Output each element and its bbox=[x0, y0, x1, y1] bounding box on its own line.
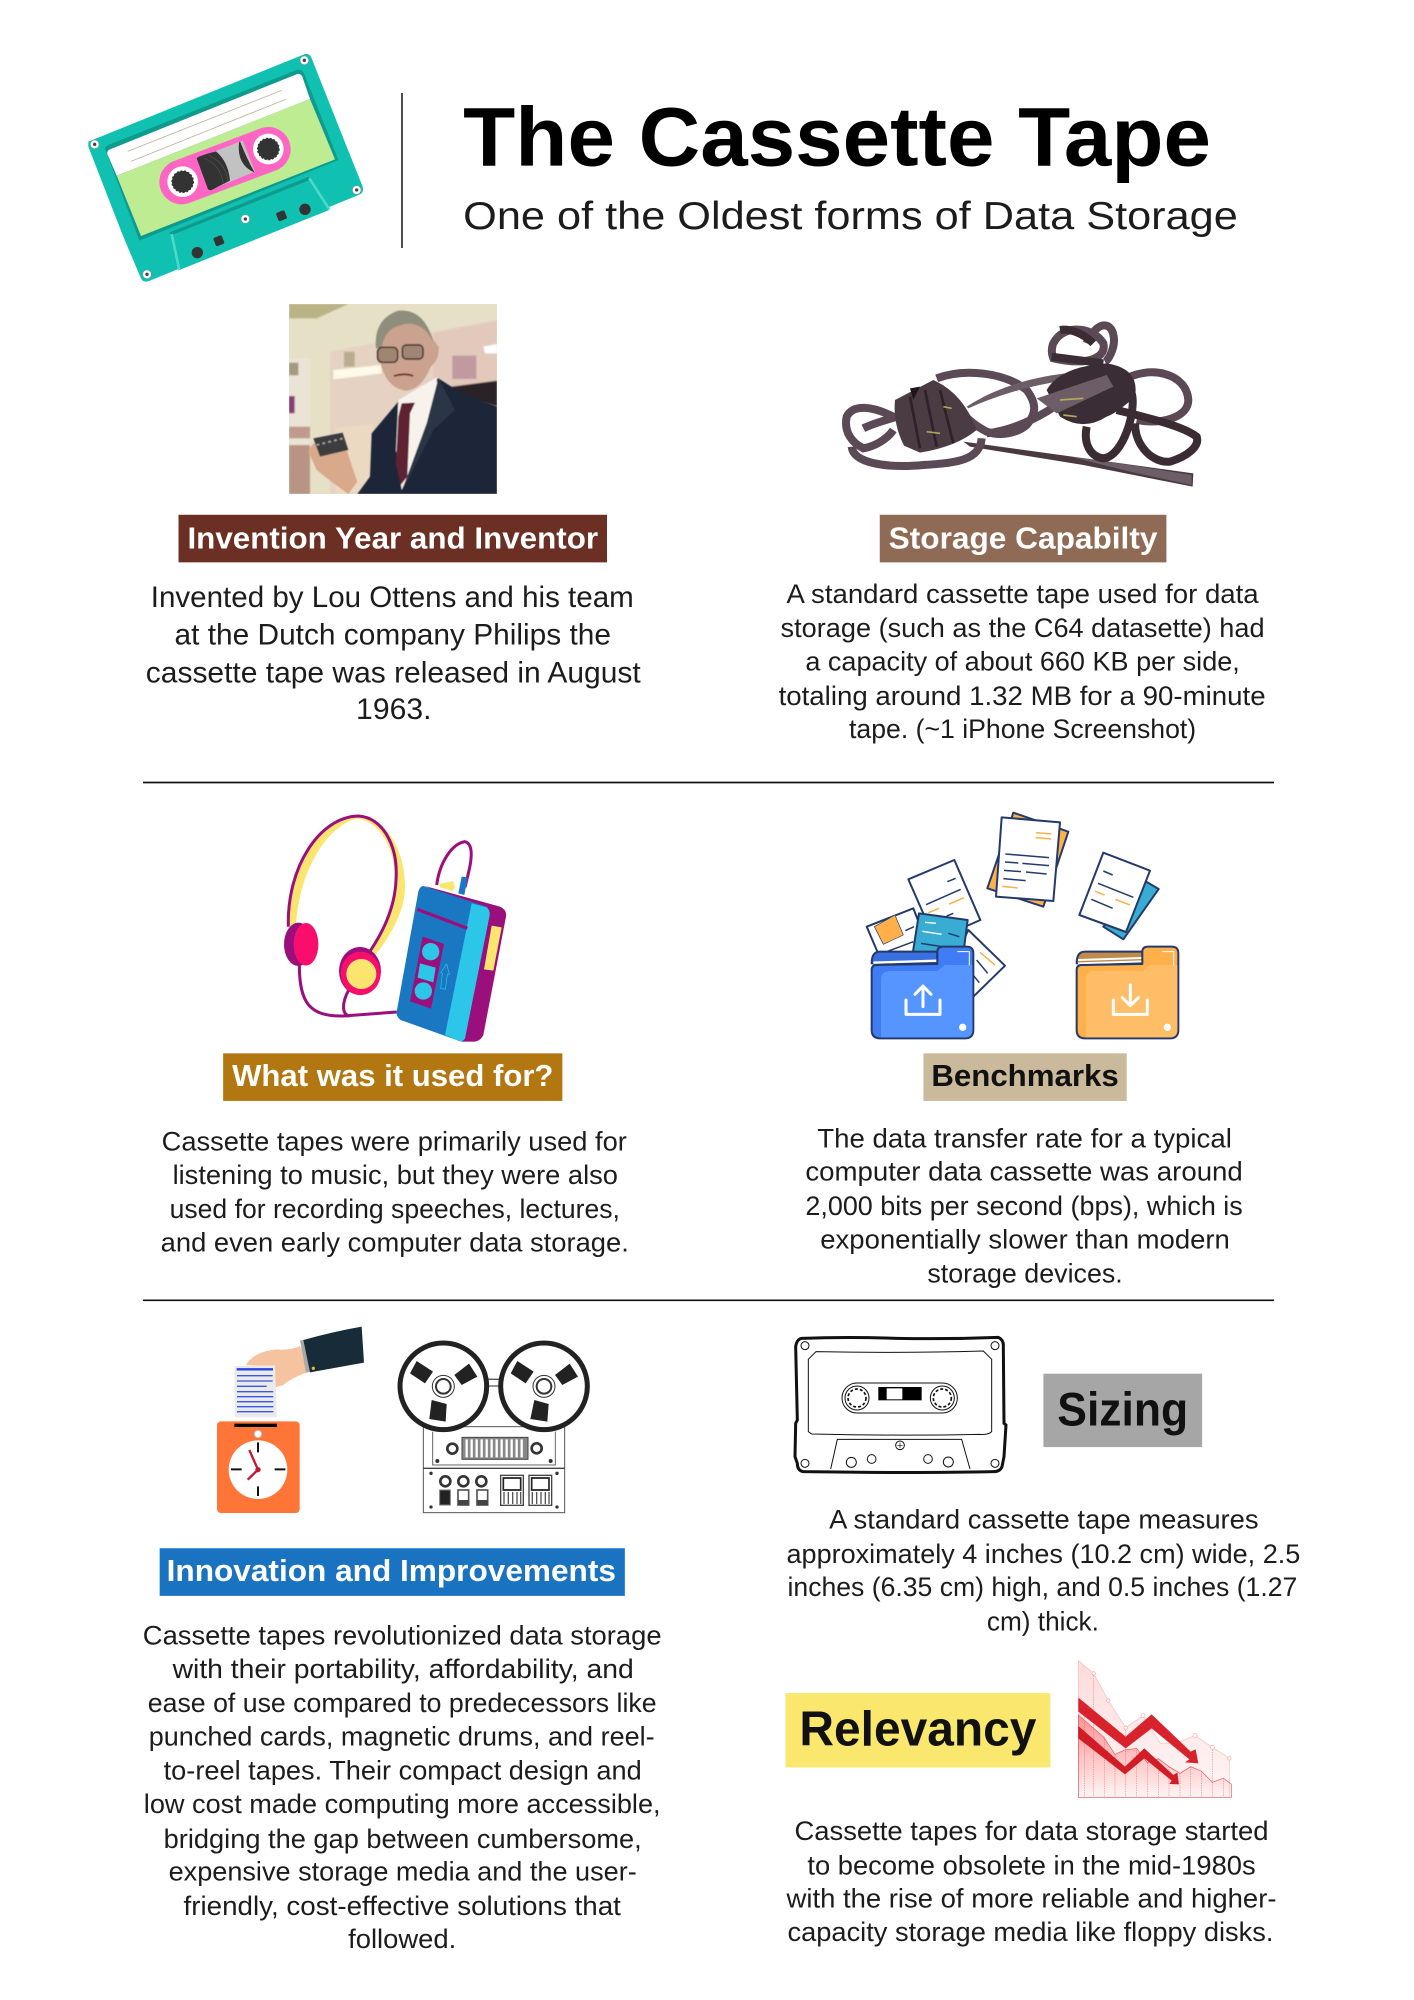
heading: Invention Year and Inventor bbox=[179, 515, 607, 562]
heading: Benchmarks bbox=[923, 1053, 1127, 1101]
orange folder bbox=[1077, 952, 1142, 963]
text block: benchmarks: computer data cassette was around bbox=[805, 1156, 1243, 1186]
panel: invention year and inventor bbox=[146, 304, 641, 726]
heading: What was it used for? bbox=[223, 1053, 562, 1101]
text block: uses: used for recording speeches, lectures, bbox=[170, 1194, 620, 1224]
text block: sizing bbox=[787, 1504, 1300, 1637]
photo: Lou Ottens holding a cassette bbox=[289, 304, 497, 494]
icon: cassette outline drawing bbox=[795, 1337, 1006, 1472]
title: The Cassette Tape bbox=[463, 91, 1211, 184]
text block: invention: Invented by Lou Ottens and his team bbox=[151, 581, 634, 614]
text block: relevancy: with the rise of more reliable and higher- bbox=[785, 1883, 1276, 1913]
text block: sizing: A standard cassette tape measures bbox=[829, 1504, 1259, 1534]
text block: relevancy: to become obsolete in the mid-1980s bbox=[807, 1851, 1256, 1881]
text block: benchmarks: exponentially slower than modern bbox=[820, 1225, 1230, 1255]
text block: innovation: followed. bbox=[348, 1924, 456, 1954]
panel: relevancy bbox=[785, 1661, 1276, 1947]
text block: uses: Cassette tapes were primarily used for bbox=[162, 1127, 627, 1157]
text block: invention bbox=[146, 581, 641, 726]
panel: innovation and improvements bbox=[143, 1327, 662, 1954]
icon: folders and flying documents bbox=[867, 813, 1178, 1038]
heading: Sizing: Sizing bbox=[1057, 1383, 1188, 1436]
text block: innovation: punched cards, magnetic drums, and reel- bbox=[149, 1722, 655, 1752]
text block: relevancy: Cassette tapes for data storage started bbox=[794, 1816, 1269, 1846]
text block: innovation: Cassette tapes revolutionized data storage bbox=[143, 1620, 662, 1650]
panel: sizing bbox=[787, 1337, 1300, 1637]
blue folder bbox=[872, 952, 937, 963]
chart: falling red trend arrows bbox=[1078, 1661, 1231, 1797]
text block: innovation: bridging the gap between cumbersome, bbox=[164, 1824, 642, 1854]
text block: benchmarks bbox=[805, 1124, 1243, 1288]
heading: Innovation and Improvements bbox=[160, 1548, 625, 1596]
text block: innovation: friendly, cost-effective solutions that bbox=[183, 1891, 621, 1921]
text block: uses bbox=[161, 1127, 629, 1258]
text block: storage bbox=[779, 579, 1266, 744]
text block: innovation bbox=[143, 1620, 662, 1954]
icon: walkman with headphones bbox=[284, 816, 506, 1042]
header divider bbox=[401, 93, 403, 248]
text block: innovation: to-reel tapes. Their compact design and bbox=[164, 1755, 642, 1785]
icon: teal cassette tape bbox=[88, 54, 363, 282]
text block: sizing: approximately 4 inches (10.2 cm) wide, 2.5 bbox=[787, 1539, 1300, 1569]
panel: storage capability bbox=[779, 325, 1266, 744]
image: tangled magnetic tape bbox=[846, 325, 1197, 487]
text block: relevancy: capacity storage media like floppy disks. bbox=[788, 1917, 1274, 1947]
text block: storage: a capacity of about 660 KB per side, bbox=[805, 646, 1240, 676]
text block: innovation: low cost made computing more accessible, bbox=[144, 1789, 661, 1819]
text block: sizing: inches (6.35 cm) high, and 0.5 inches (1.27 bbox=[788, 1572, 1297, 1602]
icon: reel-to-reel tape recorder bbox=[400, 1343, 587, 1513]
panel: benchmarks bbox=[805, 813, 1243, 1288]
text block: uses: and even early computer data storage. bbox=[161, 1228, 629, 1258]
panel: what was it used for bbox=[161, 816, 629, 1258]
heading: Relevancy bbox=[786, 1693, 1050, 1767]
text block: innovation: ease of use compared to predecessors like bbox=[148, 1688, 657, 1718]
text block: benchmarks: The data transfer rate for a typical bbox=[817, 1124, 1232, 1154]
heading: Storage Capability: Storage Capabilty bbox=[889, 520, 1157, 555]
text block: invention: 1963. bbox=[356, 693, 431, 726]
text block: storage: totaling around 1.32 MB for a 90-minute bbox=[779, 681, 1266, 711]
icon: hand placing paper into time clock bbox=[217, 1327, 364, 1513]
text block: uses: listening to music, but they were also bbox=[173, 1160, 618, 1190]
heading: Relevancy: Relevancy bbox=[799, 1701, 1037, 1757]
heading: Benchmarks: Benchmarks bbox=[931, 1058, 1119, 1093]
text block: innovation: with their portability, affordability, and bbox=[172, 1654, 634, 1684]
heading: Sizing bbox=[1043, 1374, 1202, 1447]
text block: innovation: expensive storage media and the user- bbox=[169, 1857, 637, 1887]
heading: Invention Year and Inventor: Invention Year and Inventor bbox=[187, 520, 598, 555]
subtitle: One of the Oldest forms of Data Storage bbox=[463, 195, 1238, 238]
heading: Storage Capability bbox=[880, 515, 1166, 562]
text block: invention: cassette tape was released in August bbox=[146, 656, 641, 689]
text block: sizing: cm) thick. bbox=[987, 1607, 1099, 1637]
heading: What was it used for?: What was it used for? bbox=[232, 1058, 553, 1093]
text block: benchmarks: storage devices. bbox=[927, 1258, 1123, 1288]
text block: storage: storage (such as the C64 datasette) had bbox=[781, 613, 1265, 643]
heading: Innovation and Improvements: Innovation and Improvements bbox=[167, 1553, 616, 1588]
text block: storage: A standard cassette tape used for data bbox=[787, 579, 1259, 609]
text block: invention: at the Dutch company Philips the bbox=[175, 619, 611, 652]
text block: benchmarks: 2,000 bits per second (bps), which is bbox=[805, 1191, 1243, 1221]
text block: storage: tape. (~1 iPhone Screenshot) bbox=[849, 714, 1196, 744]
text block: relevancy bbox=[785, 1816, 1276, 1947]
